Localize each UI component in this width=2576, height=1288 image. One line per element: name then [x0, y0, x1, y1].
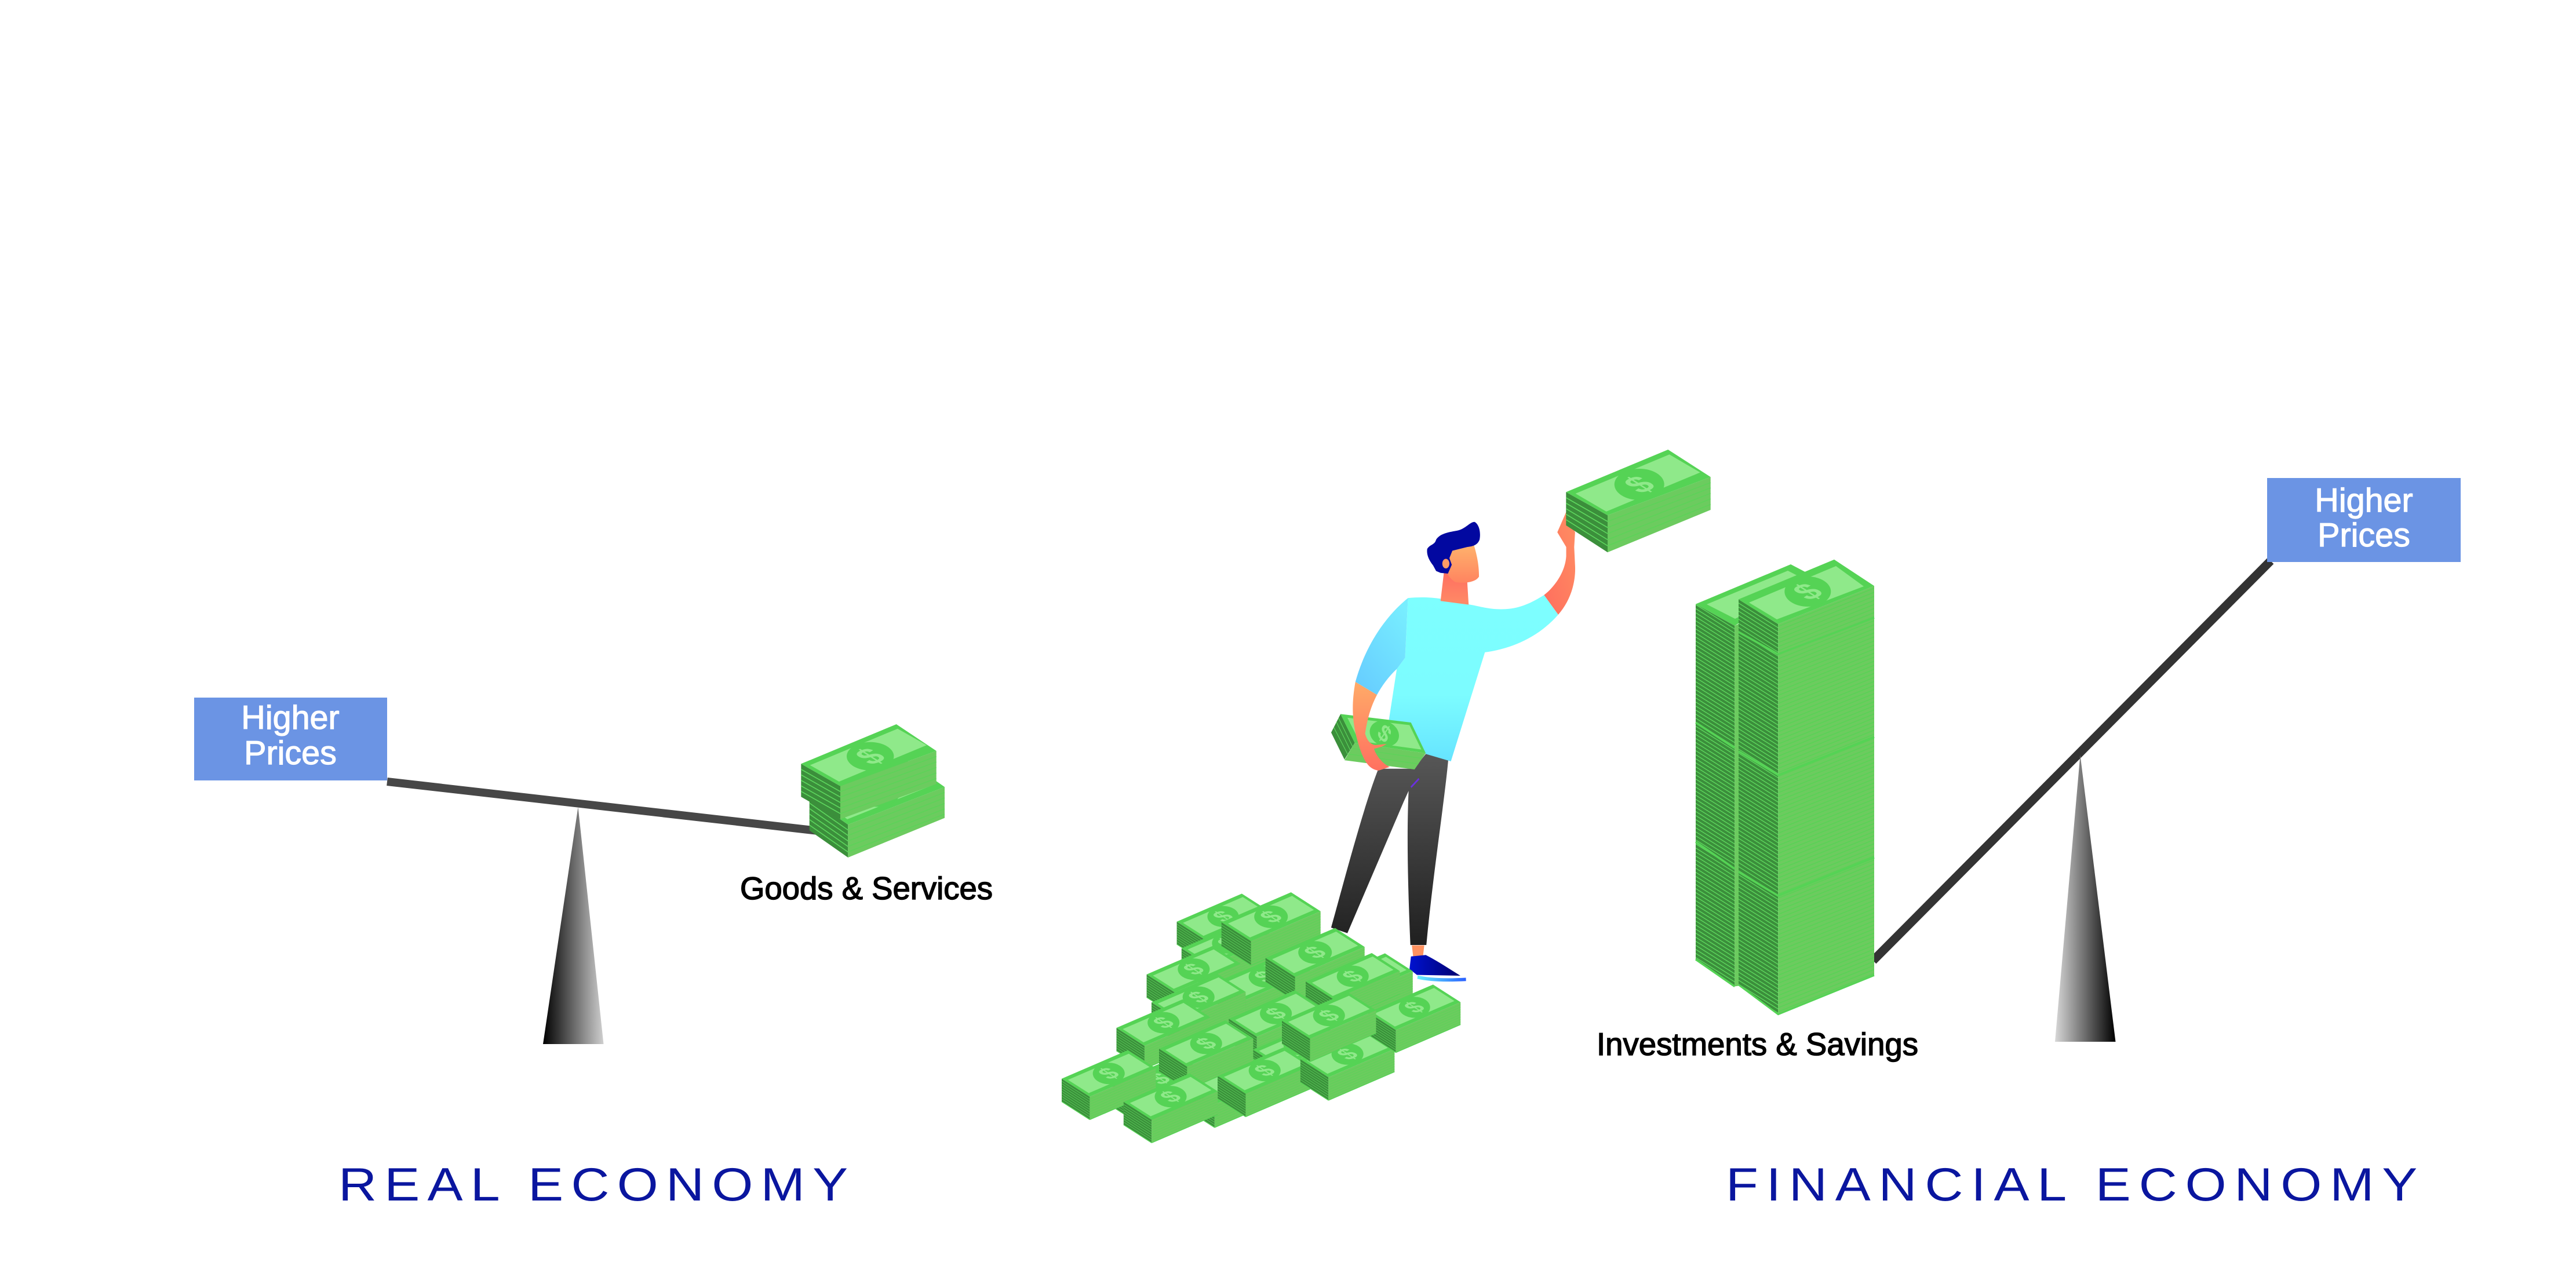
bundle: $ — [1147, 1013, 1180, 1032]
right higher prices box: Prices — [2318, 517, 2410, 554]
shirt sleeve — [1356, 598, 1408, 695]
icon: pile of money bundles — [1062, 892, 1460, 1143]
bundle: $ — [1331, 1045, 1364, 1064]
label: investments and savings: Investments & Savings — [1597, 1027, 1918, 1062]
bundle: $ — [1283, 1035, 1316, 1054]
bundle — [1218, 1048, 1311, 1116]
left higher prices box — [194, 698, 387, 780]
held money bundle — [1331, 714, 1426, 769]
bundle — [1124, 1074, 1218, 1143]
right seesaw beam — [1873, 561, 2271, 961]
bundle: $ — [1154, 1088, 1187, 1106]
bundle — [1218, 954, 1311, 1023]
icon: goods and services money stacks — [801, 724, 945, 858]
held money bundle: $ — [1373, 719, 1396, 748]
right higher prices box — [2267, 478, 2461, 562]
trouser detail — [1411, 779, 1419, 787]
bundle — [1306, 953, 1400, 1023]
bundle: $ — [1248, 1061, 1281, 1080]
ankle — [1412, 946, 1424, 958]
ear — [1442, 559, 1449, 568]
icon: goods and services money stacks: $ — [846, 743, 894, 769]
bundle: $ — [1398, 998, 1431, 1017]
bundle — [1266, 928, 1365, 1001]
front tower — [1739, 560, 1874, 1015]
left seesaw beam — [387, 782, 818, 831]
raised arm — [1544, 512, 1575, 615]
label: goods and services: Goods & Services — [740, 871, 993, 906]
bundle: $ — [1350, 967, 1383, 986]
back tower — [1696, 564, 1814, 986]
bundle — [1320, 953, 1413, 1022]
bundle — [1116, 999, 1211, 1069]
bundle: $ — [1190, 1034, 1223, 1053]
bundle: $ — [1182, 988, 1215, 1006]
bundle — [1300, 1031, 1394, 1100]
bundle: $ — [1253, 907, 1288, 926]
bundle — [1177, 893, 1269, 962]
right seesaw fulcrum — [2055, 755, 2115, 1042]
bundle — [1229, 990, 1323, 1060]
bundle: $ — [1248, 968, 1281, 986]
icon: tall money towers — [1696, 560, 1874, 1015]
bundle: $ — [1212, 934, 1244, 953]
icon: money bundle in raised hand: $ — [1616, 471, 1664, 498]
bundle — [1368, 984, 1460, 1052]
title: financial economy: FINANCIAL ECONOMY — [1726, 1159, 2417, 1211]
bundle — [1182, 921, 1274, 988]
shirt — [1389, 595, 1558, 761]
shoe — [1409, 955, 1460, 976]
bundle: $ — [1259, 1004, 1293, 1023]
bundle: $ — [1297, 942, 1332, 962]
left higher prices box: Higher — [241, 699, 340, 736]
bundle — [1062, 1050, 1156, 1119]
bundle: $ — [1177, 960, 1211, 979]
bundle: $ — [1143, 1070, 1176, 1088]
bundle — [1113, 1056, 1207, 1125]
trousers — [1331, 754, 1448, 945]
title: real economy: REAL ECONOMY — [338, 1159, 848, 1211]
front tower: $ — [1784, 578, 1831, 605]
bundle — [1222, 892, 1321, 965]
bundle — [1159, 1020, 1253, 1090]
bundle: $ — [1217, 1072, 1251, 1091]
bundle — [1152, 974, 1245, 1043]
bundle — [1253, 1022, 1345, 1090]
bundle — [1282, 993, 1376, 1061]
bundle: $ — [1207, 907, 1240, 926]
neck — [1441, 571, 1469, 605]
bundle: $ — [1313, 1006, 1346, 1025]
bundle — [1186, 1058, 1281, 1128]
person reaching for money — [1331, 512, 1575, 980]
bundle: $ — [1092, 1064, 1125, 1083]
bundle: $ — [1336, 967, 1369, 986]
right higher prices box: Higher — [2315, 482, 2413, 519]
left seesaw fulcrum — [543, 807, 604, 1044]
lower arm holding bundle — [1353, 682, 1390, 771]
left higher prices box: Prices — [244, 735, 337, 772]
hair — [1427, 522, 1480, 574]
icon: money bundle in raised hand — [1566, 450, 1711, 552]
face — [1445, 544, 1479, 583]
shoe sole — [1418, 977, 1466, 980]
bundle — [1147, 946, 1241, 1015]
